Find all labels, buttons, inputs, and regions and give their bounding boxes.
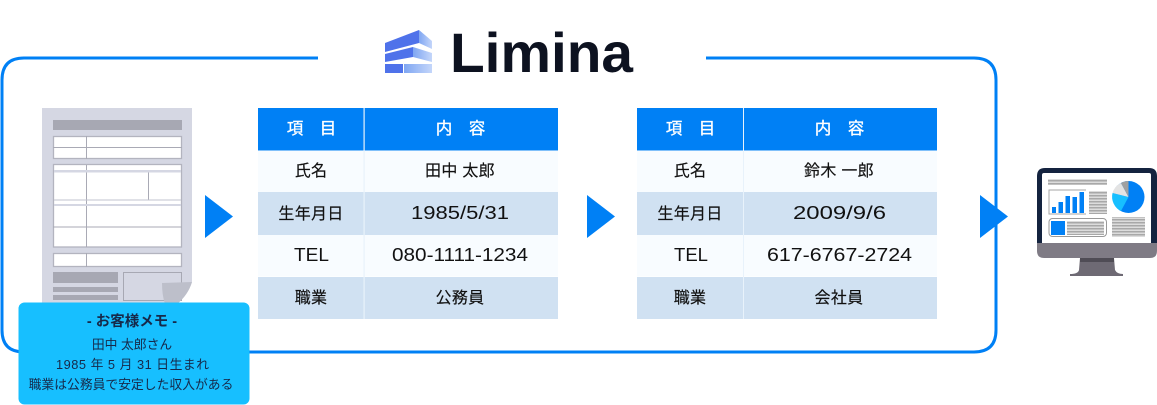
table: anonymized data: 鈴木 一郎 [804, 162, 874, 180]
table: source data: 公務員 [436, 289, 484, 307]
table: source data: 氏名 [295, 162, 327, 180]
callout: customer memo: 職業は公務員で安定した収入がある [29, 377, 233, 392]
table: source data: 職業 [295, 289, 327, 307]
arrow [205, 195, 233, 238]
callout: customer memo: 1985 年 5 月 31 日生まれ [56, 357, 209, 372]
table: anonymized data: 617-6767-2724 [767, 244, 912, 265]
icon: paper form document [42, 108, 192, 304]
wordmark: Limina [450, 21, 634, 84]
icon: Limina building [385, 30, 432, 73]
callout: customer memo [18, 302, 250, 404]
table: anonymized data: 2009/9/6 [793, 202, 886, 223]
table: anonymized data: TEL [674, 244, 708, 265]
table: source data [258, 108, 558, 319]
table: anonymized data: 氏名 [674, 162, 706, 180]
table: source data: 1985/5/31 [411, 202, 509, 223]
table: source data: 080-1111-1234 [392, 244, 528, 265]
table: source data: 生年月日 [278, 205, 344, 223]
table: anonymized data: 内 容 [815, 119, 864, 138]
table: anonymized data: 生年月日 [657, 205, 723, 223]
table: source data: TEL [294, 244, 329, 265]
logo: Limina [385, 21, 634, 84]
panel: Limina frame [2, 58, 996, 352]
table: source data: 田中 太郎 [425, 162, 495, 180]
table: source data: 内 容 [436, 119, 485, 138]
table: anonymized data [637, 108, 937, 319]
arrow [587, 195, 615, 238]
table: anonymized data: 項 目 [666, 120, 715, 138]
table: anonymized data: 職業 [674, 289, 706, 307]
table: source data: 項 目 [287, 120, 336, 138]
table: anonymized data: 会社員 [815, 289, 863, 307]
callout: customer memo: 田中 太郎さん [92, 337, 172, 352]
callout: customer memo: - お客様メモ - [87, 313, 177, 330]
arrow [980, 195, 1008, 238]
icon: monitor dashboard [1037, 168, 1157, 276]
